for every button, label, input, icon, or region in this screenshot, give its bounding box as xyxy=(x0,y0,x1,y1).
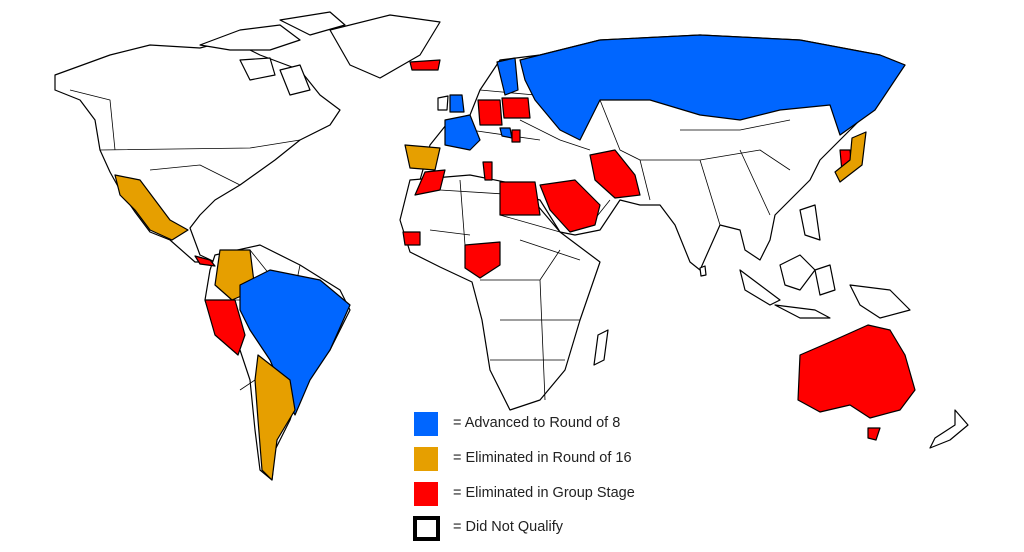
country: croatia (blue) xyxy=(500,128,512,138)
country: senegal (red) xyxy=(403,232,420,245)
country: costa rica (red) xyxy=(195,256,215,266)
country: egypt (red) xyxy=(500,182,540,215)
country: morocco (red) xyxy=(415,170,445,195)
continent: north america xyxy=(55,40,340,262)
continent: sri lanka xyxy=(700,266,706,276)
continent: madagascar xyxy=(594,330,608,365)
legend item: advanced xyxy=(414,412,620,436)
legend item: advanced: = Advanced to Round of 8 xyxy=(453,415,620,431)
country: tasmania (red) xyxy=(868,428,880,440)
country: england (blue) xyxy=(450,95,464,112)
country: saudi arabia (red) xyxy=(540,180,600,232)
country: poland (red) xyxy=(502,98,530,118)
country: peru (red) xyxy=(205,300,245,355)
continent: south america xyxy=(205,245,350,480)
country: spain (orange) xyxy=(405,145,440,170)
country: iran (red) xyxy=(590,150,640,198)
country: serbia (red) xyxy=(512,130,520,142)
country: nigeria (red) xyxy=(465,242,500,278)
country: argentina (orange) xyxy=(255,355,295,480)
country: brazil (blue) xyxy=(240,270,350,415)
country: tunisia (red) xyxy=(483,162,492,180)
country: colombia (orange) xyxy=(215,250,255,300)
continent: eurasia xyxy=(420,35,905,270)
country: iceland (red) xyxy=(410,60,440,70)
borders xyxy=(70,90,790,400)
country: france (blue) xyxy=(445,115,480,150)
country: korea (red) xyxy=(840,150,852,172)
legend item: round of 16 xyxy=(414,447,632,471)
continent: arctic islands xyxy=(200,12,345,95)
country: germany (red) xyxy=(478,100,502,125)
legend item: group stage xyxy=(414,482,635,506)
legend xyxy=(413,412,635,541)
country: mexico (orange) xyxy=(115,175,188,240)
country: australia (red) xyxy=(798,325,915,418)
legend item: did not qualify: = Did Not Qualify xyxy=(453,519,563,535)
country: japan (orange) xyxy=(835,132,866,182)
legend item: round of 16: = Eliminated in Round of 16 xyxy=(453,450,632,466)
country: sweden (blue) xyxy=(497,58,518,95)
continent: africa xyxy=(400,175,600,410)
legend item: did not qualify xyxy=(413,516,563,541)
continent: uk & ireland xyxy=(438,96,448,110)
continent: indonesia & philippines xyxy=(740,205,910,318)
continent: greenland xyxy=(330,15,440,78)
country: russia (blue) xyxy=(520,35,905,140)
legend item: group stage: = Eliminated in Group Stage xyxy=(453,485,635,501)
island: new zealand xyxy=(930,410,968,448)
